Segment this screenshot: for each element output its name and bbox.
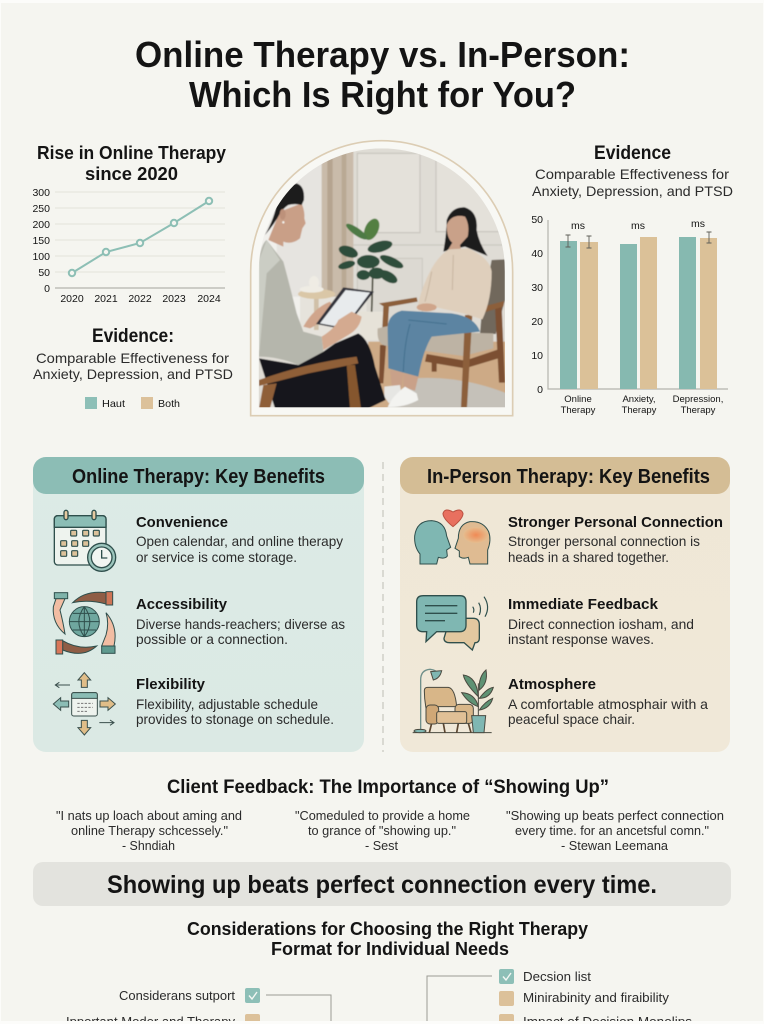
text: immediate feedback: Direct connection iosham, and	[508, 616, 694, 632]
therapist chair cushion	[305, 385, 365, 408]
panel header: online	[33, 457, 364, 494]
bar chart: comparable effectiveness: Therapy	[622, 405, 657, 416]
bar chart: comparable effectiveness: Therapy	[681, 405, 716, 416]
icon: calendar with flexible arrows	[53, 673, 115, 735]
heading: considerations: Considerations for Choosing the Right Therapy	[187, 918, 589, 939]
line chart: rise since 2020: 50	[38, 267, 50, 279]
checklist: right: Minirabinity and firaibility	[523, 990, 669, 1005]
checklist: right	[427, 969, 693, 1024]
evidence text block: left: Evidence:	[92, 326, 174, 347]
text: flexibility	[136, 676, 334, 727]
panel: in-person therapy key benefits	[400, 457, 730, 752]
evidence text block: left: Comparable Effectiveness for	[36, 350, 229, 366]
line chart: rise since 2020: 2022	[128, 293, 152, 305]
checklist: right: Decsion list	[523, 969, 591, 984]
therapist	[259, 333, 386, 408]
quote: left: - Shndiah	[122, 838, 175, 853]
text: convenience: Convenience	[136, 514, 228, 531]
evidence text block: right: Evidence	[594, 143, 671, 164]
line chart: rise since 2020: 0	[44, 283, 50, 295]
text: accessibility: Accessibility	[136, 596, 228, 613]
line chart: rise since 2020: 150	[32, 235, 50, 247]
line chart: rise since 2020: 100	[32, 251, 50, 263]
heading: considerations: Format for Individual Needs	[271, 938, 509, 959]
client	[443, 207, 488, 256]
bar chart: comparable effectiveness: Anxiety,	[622, 394, 656, 405]
quote: left	[56, 808, 242, 853]
bar chart: comparable effectiveness: Therapy	[561, 405, 596, 416]
text: stronger personal connection: Stronger personal connection is	[508, 533, 700, 549]
line chart: rise since 2020: 2023	[162, 293, 186, 305]
bar chart: comparable effectiveness: 0	[537, 384, 543, 396]
quote: right: every time. for an ancetsful comn."	[515, 823, 709, 838]
panel: online therapy key benefits	[33, 457, 364, 752]
text: stronger personal connection: heads in a shared together.	[508, 549, 669, 565]
quote: middle: - Sest	[365, 838, 398, 853]
panel header: in-person	[400, 457, 730, 494]
evidence text block: right	[532, 143, 733, 199]
heading: rise in online therapy: Rise in Online Therapy	[37, 142, 227, 163]
icon: hands around globe	[53, 592, 115, 654]
text: accessibility: possible or a connection.	[136, 631, 288, 647]
bar chart: comparable effectiveness: Online	[564, 394, 592, 405]
bar chart: comparable effectiveness: 50	[531, 214, 543, 226]
bar chart: comparable effectiveness	[531, 214, 728, 416]
quote: left: "I nats up loach about aming and	[56, 808, 242, 823]
quote: middle: "Comeduled to provide a home	[295, 808, 470, 823]
line chart: rise since 2020: 2024	[197, 293, 221, 305]
line chart: rise since 2020	[32, 187, 225, 305]
text: immediate feedback: Immediate Feedback	[508, 596, 659, 613]
heading: considerations	[187, 918, 589, 959]
bar chart: comparable effectiveness: 40	[531, 248, 543, 260]
text: accessibility: Diverse hands-reachers; diverse as	[136, 616, 345, 632]
text: atmosphere: Atmosphere	[508, 676, 596, 693]
text: convenience: Open calendar, and online therapy	[136, 533, 343, 549]
text: flexibility: Flexibility, adjustable schedule	[136, 696, 318, 712]
title: Online Therapy vs. In-Person:	[135, 34, 630, 75]
text: accessibility	[136, 596, 345, 647]
bar chart: comparable effectiveness: 10	[531, 350, 543, 362]
evidence text block: left: Anxiety, Depression, and PTSD	[33, 366, 233, 382]
quote: middle: to grance of "showing up."	[308, 823, 456, 838]
plant	[366, 312, 382, 326]
bar chart: comparable effectiveness: Depression,	[673, 394, 723, 405]
icon: two heads with heart	[415, 510, 490, 564]
quote: right	[506, 808, 724, 853]
legend: Haut	[102, 398, 125, 410]
legend	[85, 397, 180, 410]
icon: calendar with clock	[54, 510, 116, 571]
line chart: rise since 2020: 2021	[94, 293, 118, 305]
line chart: rise since 2020: 250	[32, 203, 50, 215]
bar chart: comparable effectiveness: 30	[531, 282, 543, 294]
banner: key message	[33, 862, 731, 906]
quote: middle	[295, 808, 470, 853]
evidence text block: right: Anxiety, Depression, and PTSD	[532, 183, 733, 199]
panel header: in-person: In-Person Therapy: Key Benefits	[427, 465, 710, 488]
legend: Both	[158, 398, 180, 410]
client chair	[480, 259, 505, 334]
quote: left: online Therapy schcessely."	[71, 823, 228, 838]
text: convenience	[136, 514, 343, 565]
bar chart: comparable effectiveness: ms	[691, 218, 705, 230]
line chart: rise since 2020: 300	[32, 187, 50, 199]
checklist: left: Considerans sutport	[119, 988, 235, 1003]
bar chart: comparable effectiveness: ms	[631, 220, 645, 232]
panel header: online: Online Therapy: Key Benefits	[72, 465, 325, 488]
text: stronger personal connection	[508, 514, 723, 565]
text: flexibility: Flexibility	[136, 676, 206, 693]
text: atmosphere	[508, 676, 708, 727]
text: atmosphere: peaceful space chair.	[508, 711, 635, 727]
text: convenience: or service is come storage.	[136, 549, 297, 565]
text: atmosphere: A comfortable atmosphair with a	[508, 696, 708, 712]
photo: therapist with tablet and client in arch frame	[251, 141, 513, 416]
quote: right: - Stewan Leemana	[561, 838, 669, 853]
evidence text block: left	[33, 326, 233, 382]
checklist: left	[66, 988, 331, 1024]
heading: rise in online therapy: since 2020	[85, 163, 178, 184]
text: immediate feedback	[508, 596, 694, 647]
text: stronger personal connection: Stronger Personal Connection	[508, 514, 723, 531]
evidence text block: right: Comparable Effectiveness for	[535, 166, 729, 182]
heading: rise in online therapy	[37, 142, 227, 184]
line chart: rise since 2020: 2020	[60, 293, 84, 305]
bar chart: comparable effectiveness: 20	[531, 316, 543, 328]
icon: speech bubbles	[417, 596, 488, 650]
side table	[314, 297, 319, 330]
title: Which Is Right for You?	[189, 74, 576, 115]
text: immediate feedback: instant response waves.	[508, 631, 654, 647]
banner: key message: Showing up beats perfect connection every time.	[107, 871, 657, 899]
icon: armchair, lamp and plant	[413, 669, 493, 733]
quote: right: "Showing up beats perfect connection	[506, 808, 724, 823]
bar chart: comparable effectiveness: ms	[571, 220, 585, 232]
line chart: rise since 2020: 200	[32, 219, 50, 231]
title	[135, 34, 630, 115]
heading: client feedback: Client Feedback: The Importance of “Showing Up”	[167, 777, 609, 798]
text: flexibility: provides to stonage on schedule.	[136, 711, 334, 727]
